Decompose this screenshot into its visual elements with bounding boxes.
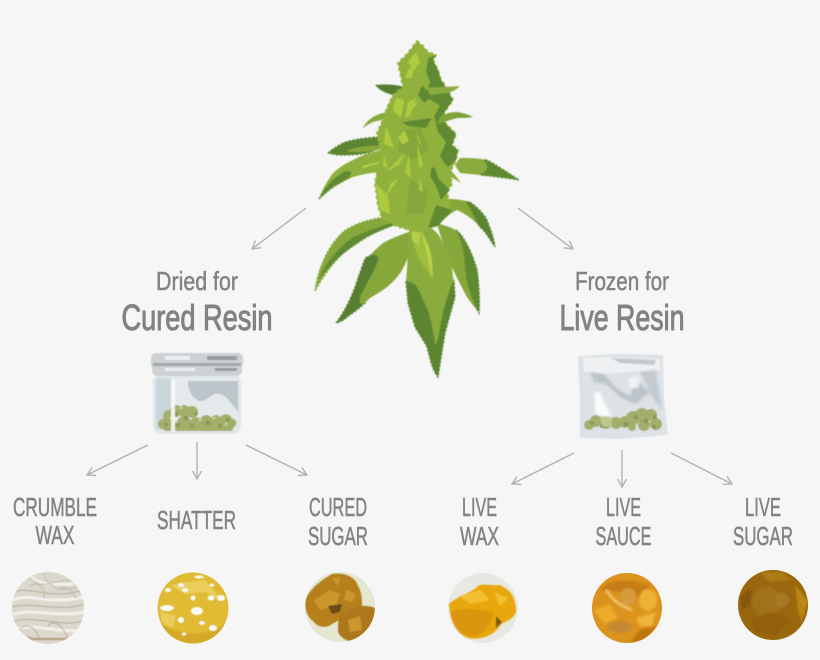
label: cured sugar: CURED xyxy=(309,492,367,522)
leaf: lower inner left xyxy=(336,232,409,323)
leaf: small upper left xyxy=(362,112,392,129)
bud shadow: right side xyxy=(425,55,458,168)
bud body xyxy=(375,41,473,232)
label: live wax: LIVE xyxy=(462,492,497,522)
leaf: lower right xyxy=(437,223,479,313)
heading: dried for cured resin xyxy=(122,266,272,338)
label: cured sugar: SUGAR xyxy=(308,521,368,551)
photo: cured sugar xyxy=(304,570,376,644)
heading: frozen for live resin: Frozen for xyxy=(575,266,669,296)
diagonal centre leaf xyxy=(430,152,461,183)
arrow: jar to cured sugar xyxy=(246,445,307,475)
bud shadow: mid clefts xyxy=(402,85,452,228)
bag contents: buds xyxy=(584,408,662,431)
label: live wax xyxy=(460,492,499,551)
label: crumble wax xyxy=(13,492,97,550)
arrow: plant to live resin xyxy=(518,208,573,249)
icon: plastic bag xyxy=(578,354,668,439)
leaf: centre hanging xyxy=(406,220,455,377)
label: live sauce xyxy=(596,492,652,551)
plant illustration xyxy=(315,41,519,377)
top leaf: right xyxy=(427,86,460,95)
photo: crumble wax xyxy=(12,572,84,644)
arrow: bag to live wax xyxy=(512,453,574,484)
heading: dried for cured resin: Cured Resin xyxy=(122,297,272,338)
arrow: jar to crumble wax xyxy=(87,445,148,475)
label: live sauce: SAUCE xyxy=(596,521,652,551)
label: cured sugar xyxy=(308,492,368,551)
bud highlights xyxy=(376,52,423,214)
leaf: top left xyxy=(375,84,408,96)
upper right leaf: mid xyxy=(437,112,473,124)
label: live wax: WAX xyxy=(460,521,499,551)
photo: live sauce xyxy=(592,573,662,643)
label: crumble wax: WAX xyxy=(36,520,74,550)
arrow: bag to live sauce xyxy=(621,450,623,487)
label: live sauce: LIVE xyxy=(606,492,641,522)
photo: live sugar xyxy=(738,570,808,640)
arrow: jar to shatter xyxy=(196,442,198,479)
leaf: right descending xyxy=(437,199,495,247)
arrow: plant to cured resin xyxy=(252,208,306,249)
leaf: middle left xyxy=(319,150,384,199)
leaf: upper middle left xyxy=(328,137,381,155)
icon: glass jar xyxy=(151,353,243,434)
leaf: right wide xyxy=(455,158,519,180)
heading: dried for cured resin: Dried for xyxy=(156,266,238,296)
arrow: bag to live sugar xyxy=(671,453,732,484)
jar contents: buds xyxy=(158,405,236,431)
heading: frozen for live resin: Live Resin xyxy=(560,297,684,338)
label: live sugar xyxy=(733,492,793,551)
label: crumble wax: CRUMBLE xyxy=(13,492,97,522)
label: shatter: SHATTER xyxy=(157,505,236,535)
leaf: lower left xyxy=(315,216,404,291)
bud tone: mid patches xyxy=(398,128,430,214)
photo: shatter xyxy=(158,572,228,644)
label: live sugar: LIVE xyxy=(745,492,781,522)
heading: frozen for live resin xyxy=(560,266,684,338)
photo: live wax xyxy=(448,573,518,643)
